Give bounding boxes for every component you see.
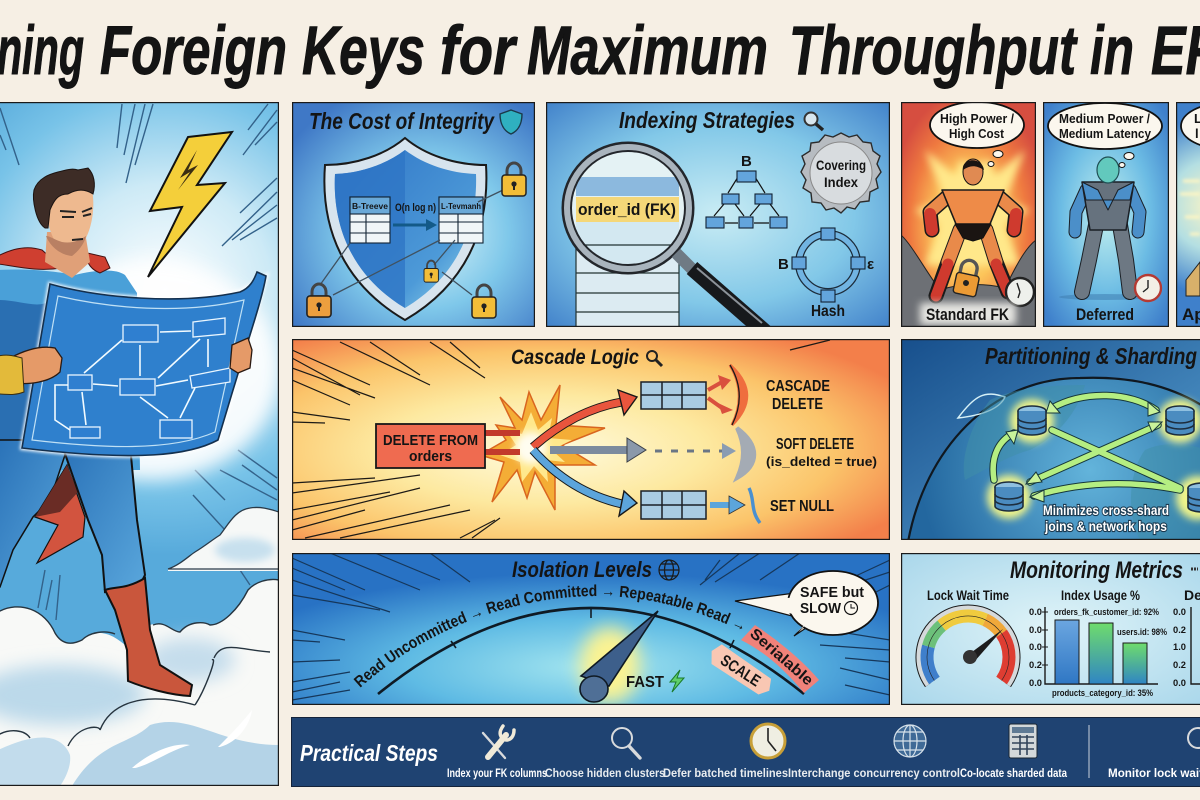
panel: practical steps (291, 717, 1200, 787)
icon: clock (1006, 278, 1034, 306)
speed lines (292, 553, 890, 700)
label: cascade delete: CASCADE (766, 378, 830, 395)
chart: deadlocks: 0.0 (1173, 607, 1186, 617)
arrow: dashed (655, 443, 736, 459)
speech bubble: SLOW (800, 600, 842, 617)
panel: the cost of integrity (292, 102, 535, 327)
figure: standard fk (930, 159, 1016, 296)
speech bubble: high power: High Cost (949, 126, 1005, 141)
connection arrows (993, 395, 1180, 496)
icon: globe (894, 725, 926, 757)
lock: bottom right (472, 285, 496, 318)
bar chart: index usage: 0.0 (1029, 678, 1042, 688)
lock: bottom left (307, 284, 331, 317)
icon: shield (500, 110, 522, 134)
blueprint (22, 272, 266, 456)
panel: deferred (1043, 102, 1169, 327)
cloud: right (168, 507, 279, 571)
title: for (440, 12, 518, 89)
table behind magnifier (575, 248, 680, 326)
label: soft delete (766, 436, 877, 469)
hash ring: B (778, 256, 789, 273)
label: Deferred (1076, 305, 1134, 324)
lock: middle (424, 261, 438, 282)
shard: southeast (1188, 483, 1200, 512)
needle (580, 611, 658, 702)
speech bubble: SAFE but (800, 584, 864, 601)
head (33, 168, 94, 278)
label: Standard FK (926, 305, 1010, 324)
red arrows and arc (708, 365, 747, 425)
speech bubble: medium power: Medium Latency (1059, 126, 1152, 141)
source box: DELETE FROM (383, 432, 478, 449)
hand: left (10, 347, 62, 384)
lightning bolt (148, 132, 232, 277)
icon: globe (659, 560, 679, 580)
speech bubble (1181, 103, 1200, 149)
arrow: red (533, 390, 637, 447)
bar chart: index usage: 0.0 (1029, 642, 1042, 652)
panel: monitoring metrics (901, 553, 1200, 705)
speed lines (292, 340, 830, 538)
icon: wrench (483, 726, 514, 758)
shard: northeast (1166, 406, 1194, 435)
magnifier handle (676, 253, 780, 345)
chart: deadlocks: 0.2 (1173, 625, 1186, 635)
chart: deadlocks: 0.0 (1173, 678, 1186, 688)
hash ring (778, 228, 874, 320)
bar chart: index usage: 0.0 (1029, 607, 1042, 617)
panel: hero (0, 102, 280, 786)
title: Maximum (527, 12, 768, 89)
needle glow (580, 627, 640, 703)
step text: Choose hidden clusters (545, 766, 665, 780)
speech bubble: l (1195, 126, 1199, 141)
hash ring: ε (867, 256, 874, 273)
shard glows (987, 399, 1200, 520)
gauge needle (963, 629, 1003, 664)
step text (447, 766, 1200, 780)
arrow: grey (550, 438, 646, 462)
magnifier lens (563, 143, 693, 274)
caption: Minimizes cross-shard (1043, 502, 1169, 518)
arc text: Read Uncommitted → Read Committed → Repeatable Read → (354, 584, 742, 688)
cape (35, 465, 85, 563)
title: ning (0, 12, 84, 89)
heading: Cascade Logic (511, 346, 639, 369)
bar chart: index usage: orders_fk_customer_id: 92% (1054, 607, 1159, 617)
gauge (919, 608, 1017, 685)
grey arc (737, 428, 754, 478)
dial arc (378, 608, 804, 694)
icon: clock (1135, 275, 1161, 301)
bar chart: index usage: users.id: 98% (1117, 627, 1167, 637)
icon: magnifier (612, 728, 640, 758)
panel: application level (1176, 102, 1200, 327)
dial ticks (451, 608, 734, 648)
label: set null: SET NULL (770, 498, 834, 515)
label: soft delete: SOFT DELETE (776, 436, 854, 453)
label: index usage: Index Usage % (1061, 587, 1140, 603)
label: lock wait time: Lock Wait Time (927, 587, 1009, 603)
badge: covering index: Index (824, 174, 858, 190)
chart: deadlocks: 1.0 (1173, 642, 1186, 652)
ground shadow (1059, 294, 1151, 300)
title: Foreign (100, 12, 287, 89)
left torso shading (0, 300, 46, 440)
panel: isolation levels (292, 553, 890, 705)
blue arrow and curve (710, 488, 760, 523)
heading: Isolation Levels (512, 557, 652, 582)
glove: left (0, 355, 24, 394)
table: cascade (641, 382, 706, 409)
panel: indexing strategies (546, 102, 890, 345)
badge: covering index (801, 133, 881, 213)
bar chart: index usage: 0.2 (1029, 660, 1042, 670)
table: right (439, 197, 483, 243)
shard: northwest (1018, 406, 1046, 435)
title: in (1090, 12, 1134, 89)
bar chart: index usage (1029, 607, 1167, 698)
step text: Interchange concurrency control (788, 766, 960, 780)
flames (915, 150, 1030, 265)
heading: The Cost of Integrity (309, 108, 495, 134)
icon: calculator (1009, 724, 1037, 758)
cape collar (0, 248, 110, 273)
table: set null (641, 491, 706, 519)
b-tree (706, 153, 787, 228)
title: Throughput (789, 12, 1078, 89)
highlighted key: order_id (FK) (578, 200, 676, 219)
glow behind figure (76, 259, 278, 492)
step text: Defer batched timelines (663, 766, 788, 780)
label plate (920, 303, 1016, 325)
table labels: B-Treeve (352, 202, 389, 211)
fast label (626, 670, 684, 692)
heading: Practical Steps (300, 740, 438, 766)
label: cascade delete: DELETE (772, 396, 823, 413)
lock: top right (502, 163, 526, 196)
speech bubble: medium power: Medium Power / (1059, 111, 1150, 126)
icon: magnifier (647, 351, 662, 366)
step text: Co-locate sharded data (960, 766, 1067, 780)
speech bubble (735, 571, 878, 636)
speech bubble: high power: High Power / (940, 111, 1014, 126)
explosion (480, 385, 605, 510)
icon: clock (751, 724, 785, 758)
caption (1043, 502, 1169, 534)
icon: small (1191, 568, 1198, 570)
label: cascade delete (766, 378, 830, 413)
icon: magnifier (804, 112, 823, 130)
table: left (350, 197, 390, 243)
fast label: FAST (626, 674, 664, 691)
arrow (393, 219, 437, 231)
arrow: blue (533, 450, 637, 516)
panel: standard fk (901, 102, 1036, 327)
title: Keys (302, 12, 425, 89)
panel border (0, 102, 279, 786)
speed lines (0, 104, 277, 620)
panel: cascade logic (292, 339, 890, 540)
left leg (0, 440, 70, 587)
step text: Index your FK columns (447, 766, 547, 780)
right leg (62, 445, 145, 592)
serializable band: Serialable (746, 625, 816, 689)
icon: lock (953, 258, 983, 297)
speech bubble: high power (930, 102, 1024, 166)
boot (105, 578, 192, 696)
hash ring: Hash (811, 303, 845, 320)
globe (908, 378, 1200, 542)
bar chart: index usage: 0.0 (1029, 625, 1042, 635)
scale tag: SCALE (717, 652, 763, 691)
chart: deadlocks: 0.2 (1173, 660, 1186, 670)
b-tree: B (741, 153, 752, 170)
figure feet (1186, 262, 1200, 296)
source box: orders (409, 448, 452, 465)
speech bubble: medium power (1048, 103, 1162, 168)
caption: joins & network hops (1044, 518, 1167, 534)
panel: partitioning and sharding (901, 339, 1200, 542)
label: soft delete: (is_delted = true) (766, 454, 877, 469)
shard: southwest (995, 482, 1023, 511)
source box (376, 424, 520, 468)
connectors (320, 190, 503, 295)
title (0, 12, 1200, 89)
hand: right (230, 338, 252, 373)
speed streaks (1180, 181, 1200, 234)
heading: Indexing Strategies (619, 107, 795, 133)
complexity label: O(n log n) (395, 202, 436, 214)
large shield (324, 138, 486, 320)
blueprint glow (22, 276, 266, 456)
bar chart: index usage: products_category_id: 35% (1052, 688, 1153, 698)
torso (0, 269, 140, 470)
scale tag (706, 642, 776, 698)
chart: deadlocks (1173, 607, 1200, 688)
icon: partial magnifier (1188, 728, 1200, 748)
badge: covering index: Covering (816, 157, 866, 173)
table label right: L-Tevmanh (441, 202, 481, 211)
cloud: bottom bank (0, 579, 279, 786)
figure: deferred (1075, 157, 1140, 292)
divider (1088, 725, 1090, 778)
arrow heads (1006, 401, 1162, 502)
rubble (901, 235, 1036, 327)
